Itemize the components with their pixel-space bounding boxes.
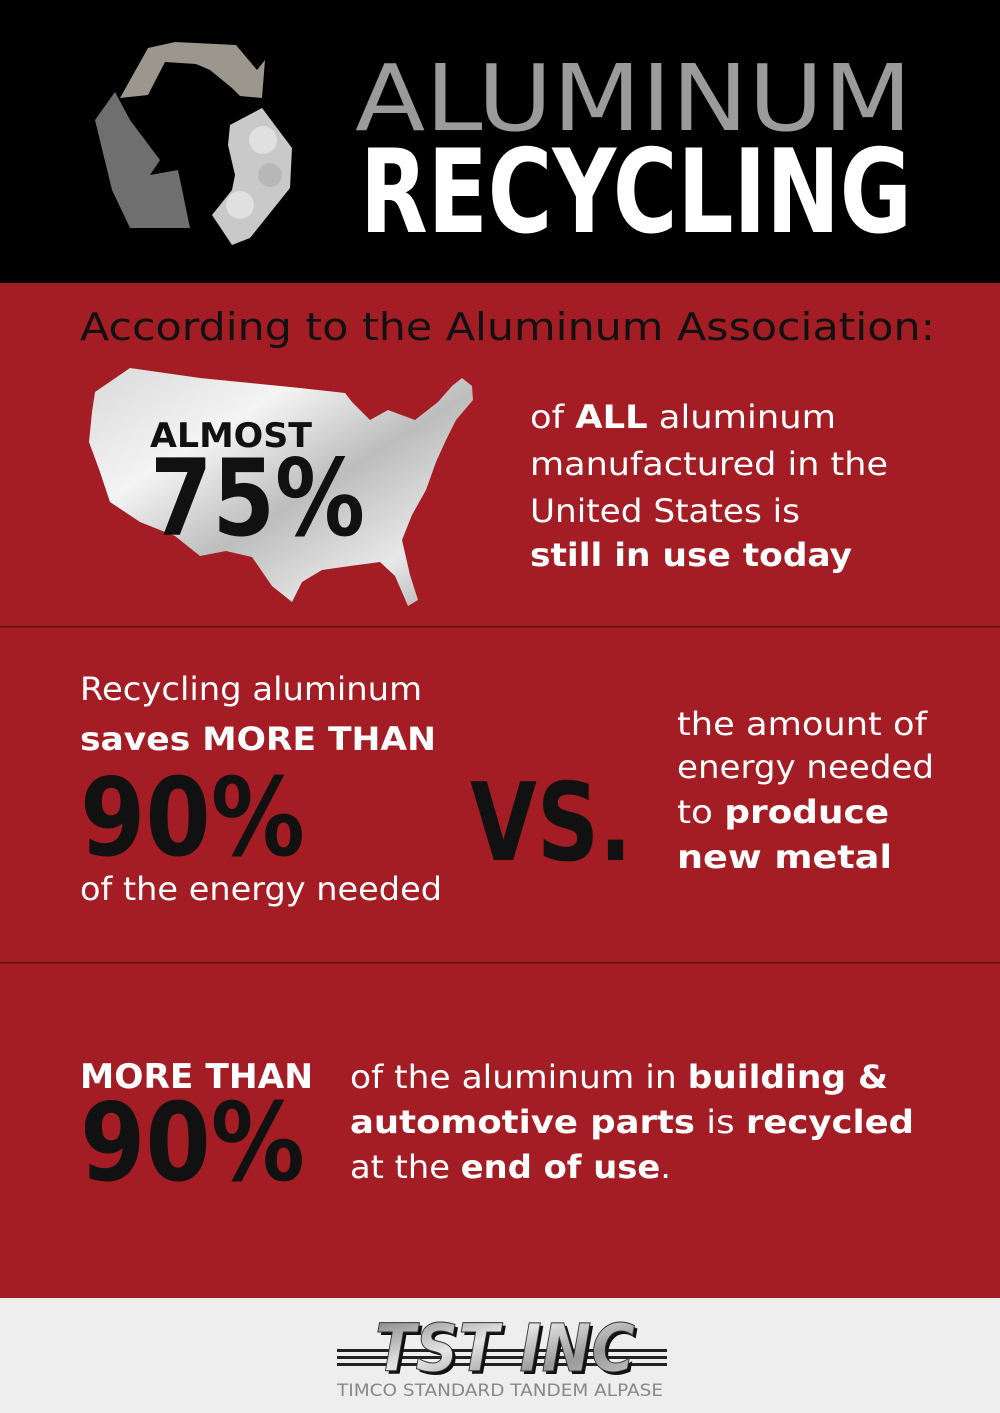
panel: energy savings: of the energy needed xyxy=(80,870,442,908)
panel: end of use recycling: automotive parts is recycled xyxy=(350,1103,914,1141)
map of USA xyxy=(89,368,473,606)
panel: 75% stat: ALMOST xyxy=(150,416,313,456)
panel: energy savings: new metal xyxy=(677,838,892,876)
icon: recycling symbol xyxy=(95,42,292,245)
footer xyxy=(0,1298,1000,1413)
title: ALUMINUM xyxy=(355,45,912,152)
panel: end of use recycling: at the end of use . xyxy=(350,1148,671,1186)
intro heading: According to the Aluminum Association: xyxy=(80,305,935,349)
logo: TST INC: TST INC xyxy=(375,1310,635,1387)
title xyxy=(355,45,912,260)
panel: energy savings: energy needed xyxy=(677,748,934,786)
panel: energy savings: Recycling aluminum xyxy=(80,670,422,708)
panel: end of use recycling xyxy=(80,1057,914,1206)
panel: end of use recycling: 90% xyxy=(80,1081,305,1206)
stat description: United States is xyxy=(530,492,800,530)
panel: energy savings: the amount of xyxy=(677,705,928,743)
header background xyxy=(0,0,1000,283)
panel: energy savings: 90% xyxy=(80,756,305,881)
VS.: VS. xyxy=(470,761,632,886)
stat description: of ALL aluminum xyxy=(530,398,836,436)
stat description xyxy=(530,398,888,574)
panel: energy savings: saves MORE THAN xyxy=(80,720,436,758)
panel: end of use recycling: of the aluminum in building & xyxy=(350,1058,888,1096)
panel: end of use recycling: MORE THAN xyxy=(80,1057,313,1097)
logo: TST INC: TIMCO STANDARD TANDEM ALPASE xyxy=(336,1381,663,1401)
stat description: still in use today xyxy=(530,536,852,574)
logo: TST INC: TST INC xyxy=(378,1313,638,1390)
panel: energy savings xyxy=(80,670,934,908)
panel: 75% stat xyxy=(89,368,888,606)
panel: energy savings: to produce xyxy=(677,793,889,831)
panel: 75% stat: 75% xyxy=(150,437,365,560)
stat description: manufactured in the xyxy=(530,445,888,483)
